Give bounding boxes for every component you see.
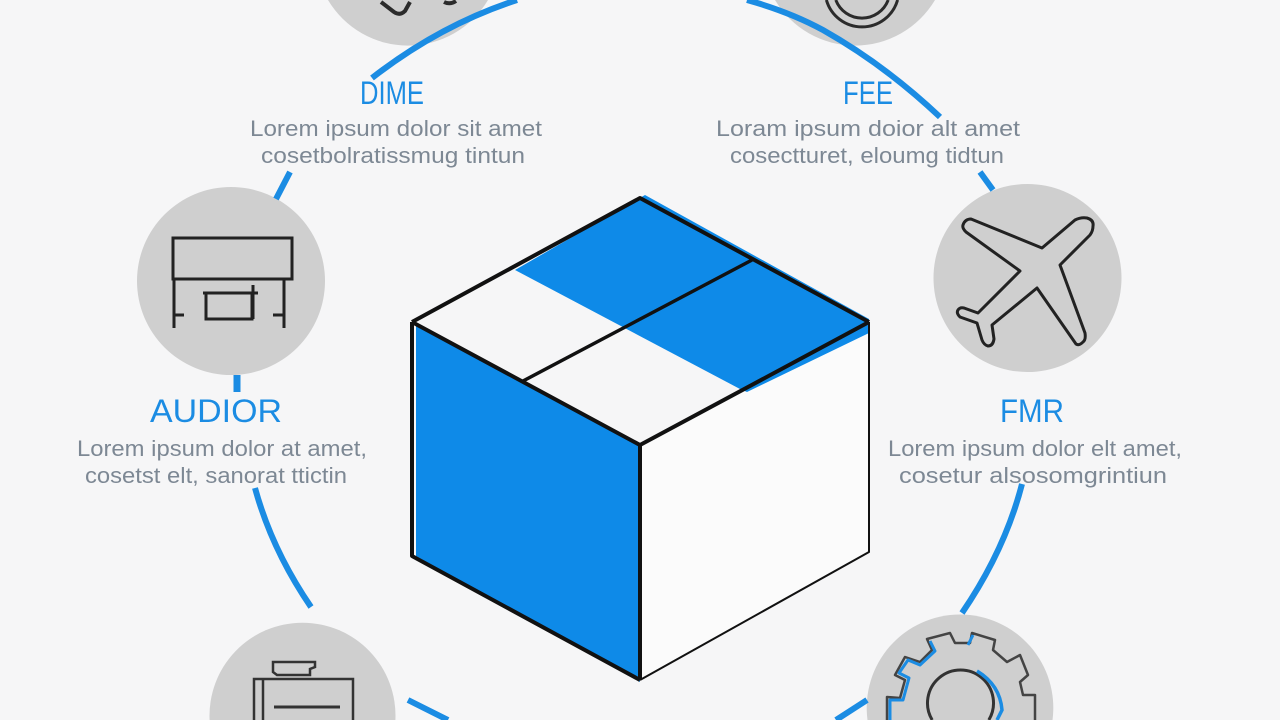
- icon: desk: [137, 187, 325, 375]
- text block: fee: FEE: [843, 75, 893, 111]
- text block: fee: cosectturet, eloumg tidtun: [730, 143, 1004, 168]
- text block: dime: [250, 75, 542, 168]
- text block: fmr: Lorem ipsum dolor elt amet,: [888, 436, 1182, 461]
- box outlines: [412, 198, 869, 680]
- icon: clipboard: [209, 623, 396, 720]
- box top blue stripe: [515, 195, 869, 392]
- ring segments: [237, 0, 1022, 720]
- text block: dime: DIME: [360, 75, 424, 111]
- text block: fee: [716, 75, 1020, 168]
- text block: auditor: cosetst elt, sanorat ttictin: [85, 463, 347, 488]
- icon: airplane: [934, 184, 1122, 372]
- icon: top left circle: [328, 0, 488, 46]
- text block: auditor: AUDIOR: [150, 393, 282, 429]
- text block: dime: Lorem ipsum dolor sit amet: [250, 116, 542, 141]
- text block: fmr: [888, 393, 1182, 488]
- text block: fee: Loram ipsum doior alt amet: [716, 116, 1020, 141]
- central box: [412, 195, 869, 682]
- icon: top right circle: [775, 0, 935, 46]
- text block: fmr: cosetur alsosomgrintiun: [899, 463, 1167, 488]
- box right face: [640, 322, 869, 680]
- text block: auditor: Lorem ipsum dolor at amet,: [77, 436, 367, 461]
- text block: auditor: [77, 393, 367, 488]
- box left face: [416, 325, 640, 682]
- text block: fmr: FMR: [1000, 393, 1064, 429]
- text block: dime: cosetbolratissmug tintun: [261, 143, 525, 168]
- icon: gear: [867, 615, 1053, 720]
